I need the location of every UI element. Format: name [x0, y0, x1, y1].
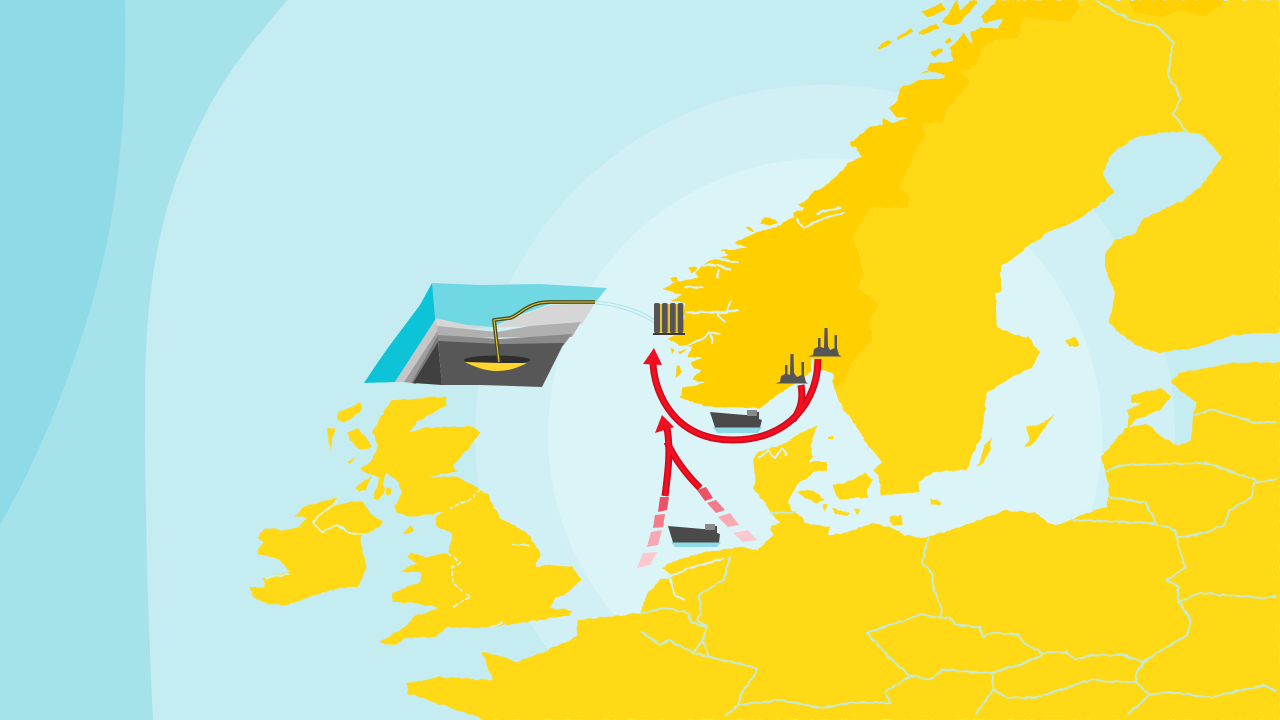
fjords: [683, 208, 843, 372]
land: continental Europe: [407, 362, 1280, 720]
rock layers: [435, 303, 595, 330]
fading dashes east: [697, 487, 757, 542]
sea inlets on the continent: [665, 448, 1092, 600]
land: Sweden and Finland: [834, 0, 1280, 495]
subsea pipeline to platform: [595, 301, 655, 323]
arrow: from refineries to platform: [643, 348, 818, 440]
country borders: [641, 1, 1276, 715]
land: Great Britain: [327, 397, 581, 645]
icon: tanker north: [710, 410, 762, 433]
cut-away left face: [364, 283, 437, 383]
land: northern Norway tip and islands: [670, 0, 1226, 378]
arrow: imports to platform area: [637, 415, 757, 568]
well pipe: [494, 302, 595, 362]
land: Norway: [663, 0, 1080, 408]
icon: refinery west: [775, 354, 808, 384]
icon: refinery east: [808, 328, 842, 356]
land: Ireland: [250, 498, 383, 605]
icon: offshore storage platform: [653, 303, 685, 335]
reservoir cross-section block: [364, 283, 607, 387]
oil reservoir: [464, 356, 530, 364]
Baltic islands: Gotland, Oland, Aland and Estonian islands: [930, 337, 1172, 505]
Danish islands: [798, 436, 903, 525]
icon: tanker south: [668, 524, 721, 547]
fading dashes west: [637, 497, 669, 568]
UK borders: [265, 488, 530, 627]
water layer: [432, 283, 607, 327]
